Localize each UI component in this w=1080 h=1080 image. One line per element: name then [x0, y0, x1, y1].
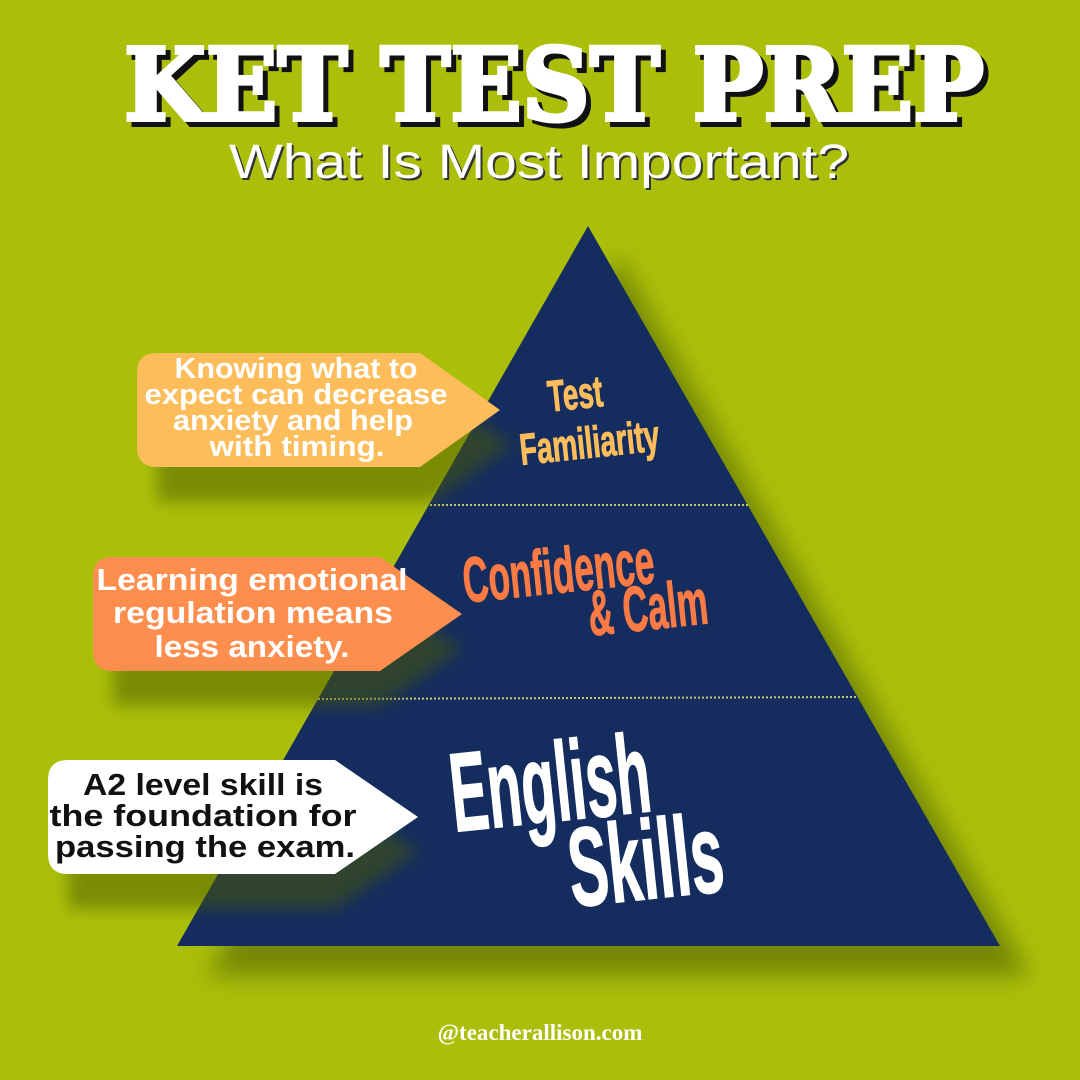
subtitle: What Is Most Important? — [231, 138, 851, 191]
title: KET TEST PREP — [124, 26, 984, 144]
tier label: confidence & calm — [459, 520, 711, 662]
callout: confidence & calm — [93, 557, 462, 706]
subtitle: What Is Most Important? — [229, 136, 849, 189]
tier label: confidence & calm: Confidence — [459, 525, 658, 617]
tier label: test familiarity: Test — [545, 367, 605, 422]
callout: test familiarity — [137, 353, 512, 502]
callout: test familiarity: anxiety and help — [173, 405, 413, 437]
pyramid — [177, 226, 1030, 976]
tier label: english skills: English — [444, 710, 656, 856]
tier label: english skills: Skills — [562, 790, 729, 931]
callout: test familiarity: with timing. — [208, 431, 384, 463]
callout: english skills: passing the exam. — [55, 829, 355, 864]
tier label: test familiarity: Familiarity — [517, 411, 662, 475]
callout: test familiarity: expect can decrease — [144, 379, 448, 411]
tier label: test familiarity — [512, 362, 662, 475]
callout: confidence & calm: Learning emotional — [96, 562, 408, 597]
callout: english skills — [48, 760, 418, 909]
footer: @teacherallison.com — [438, 1020, 642, 1046]
callout: test familiarity: Knowing what to — [174, 353, 418, 385]
tier label: confidence & calm: & Calm — [584, 565, 711, 650]
callout: english skills: A2 level skill is — [83, 767, 323, 802]
callout: confidence & calm: regulation means — [113, 595, 393, 630]
title: KET TEST PREP — [129, 31, 989, 149]
tier label: english skills — [444, 704, 729, 942]
callout: confidence & calm: less anxiety. — [154, 629, 350, 664]
callout: english skills: the foundation for — [50, 798, 356, 833]
